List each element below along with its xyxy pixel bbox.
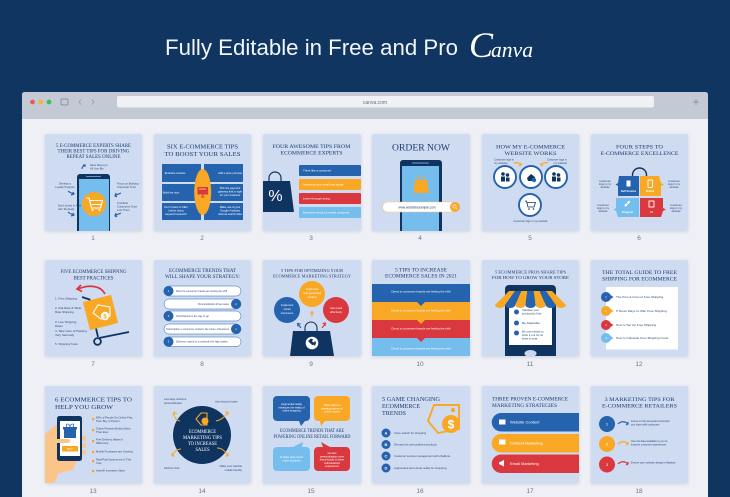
tip text: improve customer experiences [631, 442, 667, 446]
labels: Make your website [220, 464, 243, 468]
tip bars: Think like a customer [303, 168, 331, 172]
search bar: www.websiteexample.com [398, 205, 436, 209]
steps: 5 Smart Ways to Offer Free Shipping [616, 309, 667, 313]
side labels: Customer [668, 179, 680, 183]
title: SHIPPING FOR ECOMMERCE [602, 276, 678, 282]
steps: How to Set Up Free Shipping [616, 323, 656, 327]
side labels [597, 179, 683, 213]
puzzle blocks: Self Service [621, 189, 637, 193]
title [164, 144, 241, 158]
center ellipse icon [194, 169, 211, 215]
list: stick it out for at [522, 333, 543, 337]
central circle: SALES [196, 448, 210, 453]
title [60, 269, 127, 282]
speech bubbles: AI helps shop owner [280, 455, 303, 459]
browser content area [22, 119, 708, 497]
number 6: 6 [637, 235, 641, 242]
steps: 4 [605, 336, 607, 340]
side labels: Customer [670, 203, 682, 207]
number 10: 10 [416, 361, 424, 368]
shipping list: 3. Live Shipping [55, 320, 77, 324]
card 18 [591, 386, 688, 483]
labels: Add live chat [164, 466, 180, 470]
arrows [618, 422, 628, 465]
title: MARKETING STRATEGIES [492, 403, 557, 409]
title: WILL SHAPE YOUR STRATEGY: [165, 275, 240, 280]
puzzle blocks: AI [650, 210, 653, 214]
title: THEIR BEST TIPS FOR DRIVING [58, 150, 130, 154]
card 8 [154, 260, 251, 356]
number 11: 11 [527, 361, 534, 368]
list: Year [96, 461, 102, 465]
speech bubbles: Augmented reality [281, 402, 303, 406]
number 16: 16 [416, 488, 424, 495]
number 15: 15 [307, 488, 315, 495]
title: 5 TIPS TO INCREASE [395, 268, 447, 274]
side labels: logs in my [599, 182, 612, 186]
title: REPEAT SALES ONLINE [66, 155, 121, 160]
headline: Fully Editable in Free and Pro [165, 35, 458, 60]
strategy bars: Content Marketing [510, 440, 543, 446]
title [492, 396, 568, 409]
arrows [172, 412, 228, 456]
tip circles: content [308, 295, 317, 299]
title: 5 GAME CHANGING [382, 396, 441, 403]
list: Intent/If Increases Sales [96, 468, 125, 472]
labels: Customer logs in [547, 158, 567, 162]
card 3 [263, 134, 361, 230]
tip bars: Business email to rewrite customer [303, 210, 350, 214]
tip text: Don't invest in SEO [164, 205, 188, 209]
callouts: Don't Invest in Paid [58, 204, 82, 208]
shipping list: Very Seriously [55, 333, 75, 337]
labels: Use discount sales [215, 400, 238, 404]
title [600, 144, 679, 157]
list: Online Reviews Build a More [96, 426, 131, 430]
steps: 3 [605, 323, 607, 327]
labels: my website [554, 161, 567, 165]
rows: B [385, 442, 388, 447]
callouts [55, 163, 139, 212]
card 11 [482, 260, 579, 357]
list: Be Adaptable [522, 321, 540, 325]
central circle: TO INCREASE [188, 442, 217, 447]
number 17: 17 [526, 488, 534, 495]
title: FOR HOW TO GROW YOUR STORE [492, 275, 569, 280]
labels: Leverage real-time [164, 397, 187, 401]
list: Mobile Purchases are Growing [96, 450, 133, 454]
shopping bag [290, 322, 334, 356]
list: Then Buy in Person [96, 419, 120, 423]
list: Be committed to [522, 330, 544, 334]
browser toolbar: canva.com [363, 100, 387, 106]
list: 83% of People Go Online First, [96, 416, 133, 420]
list: Validate your [522, 308, 539, 312]
tip text: Pick the payment [220, 186, 241, 190]
stacked bands: Direct to consumer brands are feeling the shift [391, 326, 451, 330]
speech bubbles: brand loyalty & better [320, 458, 344, 462]
tip text: Build the trust [163, 190, 179, 194]
card 12 [591, 260, 688, 356]
list [92, 416, 133, 472]
pill text: Direct to consumer brands are feeling the shift [176, 290, 227, 293]
title: TRENDS [382, 410, 407, 417]
callouts: Develop a [59, 182, 72, 186]
callouts: Save Money in [90, 163, 108, 167]
tip text: for your business [220, 193, 241, 197]
tip bars: Learn through doing [303, 196, 330, 200]
title [602, 397, 677, 410]
title: WEBSITE WORKS [504, 151, 556, 157]
bag handle [632, 168, 646, 176]
speech bubbles: Go-wire [327, 451, 337, 455]
tip bars: Interview your small test buyer [303, 182, 344, 186]
card 6 [591, 134, 688, 230]
tip circles: social [284, 307, 291, 311]
title: 5 TIPS FOR OPTIMIZING YOUR [281, 268, 343, 273]
side labels: logs in my [670, 206, 683, 210]
phone [400, 160, 442, 231]
steps: How to Calculate Free Shipping Costs [616, 336, 669, 340]
browser window [22, 92, 708, 497]
number 8: 8 [200, 361, 204, 368]
speech bubbles: enhances the reality of [278, 405, 305, 409]
list: least a year [522, 336, 538, 340]
card 14 [154, 386, 251, 483]
title: POWERING ONLINE RETAIL FORWARD [274, 435, 351, 440]
list: Free Delivery Makes A [96, 438, 123, 442]
title: TO BOOST YOUR SALES [164, 151, 241, 158]
shopping bag: % [268, 188, 283, 205]
badge digits: 1 [168, 289, 170, 293]
number 12: 12 [635, 361, 643, 368]
speech bubbles: experiences [325, 464, 340, 468]
tip bars [299, 165, 361, 218]
title: ECOMMERCE SALES IN 2021 [385, 274, 457, 280]
stacked bands: Direct to consumer brands are feeling the shift [391, 308, 451, 312]
circle icons [501, 172, 560, 210]
title: 5 E-COMMERCE EXPERTS SHARE [56, 144, 131, 149]
hand [45, 424, 78, 483]
title: BEST PRACTICES [74, 276, 114, 282]
tip circles: user-generated [303, 291, 322, 295]
callouts: Ads Too Early [58, 207, 75, 211]
curved arrows [514, 163, 548, 166]
number 4: 4 [418, 235, 422, 242]
steps: The Pros & Cons of Free Shipping [616, 295, 663, 299]
speech bubbles: personalization sees [320, 454, 345, 458]
number 14: 14 [198, 488, 206, 495]
title [492, 270, 569, 280]
arrows [298, 312, 326, 328]
number badges [164, 286, 241, 347]
tip text: before doing [169, 208, 184, 212]
phone: BUY [67, 447, 73, 451]
callouts: Lost Them [117, 208, 130, 212]
card 9 [263, 260, 361, 356]
number 7: 7 [91, 361, 95, 368]
side labels: logs in my [597, 206, 610, 210]
tip text: Ensure your website design is flawless [631, 460, 676, 464]
tip text: keyword research [165, 212, 187, 216]
title: ECOMMERCE [382, 403, 420, 410]
number 5: 5 [528, 235, 532, 242]
number 2: 2 [200, 235, 204, 242]
title [602, 270, 678, 282]
title [272, 144, 351, 156]
awning [495, 291, 566, 308]
tip boxes [162, 164, 243, 220]
title [274, 429, 351, 440]
pills [164, 286, 241, 346]
title [496, 144, 566, 157]
tip circles: commerce [281, 311, 294, 315]
rows: Customer service management with chatbots [394, 454, 451, 458]
tip circles: Implement [281, 303, 294, 307]
number 3: 3 [309, 235, 313, 242]
tip circles: Use email [330, 306, 342, 310]
phone illustration [77, 174, 110, 231]
badge digits [168, 289, 237, 344]
puzzle blocks [614, 176, 666, 217]
badge digits: 5 [168, 340, 170, 344]
step circles [494, 166, 567, 216]
title [273, 268, 352, 278]
title: E-COMMERCE RETAILERS [602, 404, 677, 410]
speech bubbles: There will be a [324, 403, 341, 407]
card 10 [372, 260, 470, 356]
title: E-COMMERCE EXCELLENCE [600, 151, 679, 157]
title: HELP YOU GROW [55, 404, 113, 411]
title: 6 ECOMMERCE TIPS TO [55, 396, 133, 404]
tip text [631, 419, 676, 464]
tip text: Use the data available to you to [631, 439, 668, 443]
card 15 [263, 386, 361, 483]
tip text: Make use of your [220, 205, 240, 209]
puzzle blocks: Mobile [646, 189, 655, 193]
strategy bars: Website Content [510, 420, 540, 424]
hand truck [82, 297, 129, 345]
number 13: 13 [89, 488, 97, 495]
callouts: Loyalty Program [55, 185, 76, 189]
shipping list: 2. Flat Rate & Table [55, 306, 82, 310]
tip text [163, 171, 242, 216]
tip circles: Implement [306, 287, 319, 291]
pill text: Subscription e-commerce model is the future of business [166, 328, 230, 331]
pill text: Delivery's speed is a contender for high stakes [176, 341, 228, 344]
card 1 [45, 134, 142, 231]
tip text: internal search data [218, 212, 242, 216]
headline: anva [491, 37, 533, 62]
card 2 [154, 134, 251, 230]
title: FIVE ECOMMERCE SHIPPING [60, 269, 127, 275]
title [385, 268, 457, 280]
title: 3 MARKETING TIPS FOR [604, 397, 675, 403]
badge digits: 2 [235, 302, 237, 306]
shipping list: 4. Take Care of Packing [55, 329, 87, 333]
speech bubbles: online shopping [282, 409, 301, 413]
template grid [45, 134, 688, 495]
title: ECOMMERCE TRENDS THAT [169, 269, 236, 274]
red arrow [77, 285, 105, 294]
speech bubbles: individualized [324, 461, 340, 465]
card 17 [482, 386, 579, 483]
side labels: Customer [597, 203, 609, 207]
pill text: Omnichannel is the way to go [176, 315, 209, 318]
tip text: gateway that is right [218, 190, 242, 194]
list: product(s) first [522, 312, 541, 316]
title: FOUR STEPS TO [616, 144, 663, 150]
steps [601, 292, 669, 343]
title: THE TOTAL GUIDE TO FREE [602, 270, 678, 276]
strategy bars: Email Marketing [510, 461, 539, 466]
speech bubbles: mobile search [324, 410, 341, 414]
speech bubbles: growing volume of [321, 406, 343, 410]
title: HOW MY E-COMMERCE [496, 144, 566, 150]
orange parcel: $ [103, 314, 107, 320]
title: ECOMMERCE TRENDS THAT ARE [280, 429, 344, 434]
labels [494, 158, 567, 223]
steps: 1 [605, 295, 607, 299]
card 7 [45, 260, 142, 356]
list [514, 308, 544, 340]
central circle: ECOMMERCE [189, 430, 216, 435]
white panel [606, 287, 678, 350]
tip text: Add a price promise [218, 171, 242, 175]
side labels: website [600, 185, 610, 189]
callouts: Customers Once [117, 204, 138, 208]
puzzle blocks: Integrate [622, 210, 634, 214]
strategy bars [492, 413, 579, 473]
title: ORDER NOW [392, 142, 451, 152]
pill text: Personalization drives sales [198, 303, 230, 306]
list: Real-Paid Options are In This [96, 458, 132, 462]
price tag icon: $ [448, 418, 455, 432]
title: SIX E-COMMERCE TIPS [167, 144, 239, 150]
shipping list: 5. Shipping Tools [55, 342, 78, 346]
number 18: 18 [635, 488, 643, 495]
tip circles [274, 281, 349, 323]
side labels: website [669, 185, 679, 189]
step circles: 3 [606, 462, 609, 467]
labels [164, 397, 243, 472]
rows: Augmented and virtual reality for shopping [394, 466, 447, 470]
tip text: Embrace reviews [165, 171, 186, 175]
labels: my website [494, 161, 508, 165]
shipping list: Rate Shipping [55, 310, 74, 314]
speech bubbles: reach shoppers [283, 458, 301, 462]
card 16 [372, 386, 470, 483]
card 5 [482, 134, 579, 230]
storefront phone [505, 285, 556, 357]
side labels: website [671, 209, 681, 213]
speech bubbles [273, 396, 350, 471]
labels: mobile friendly [225, 468, 243, 472]
callouts: All Your Biz [90, 166, 104, 170]
tip text: Google Analytics [220, 208, 241, 212]
side labels: website [598, 209, 608, 213]
callouts: Corporate Trust [117, 185, 136, 189]
rows: C [385, 454, 388, 458]
badge digits: 4 [235, 327, 237, 331]
step circles: 2 [606, 442, 609, 446]
central circle: MARKETING TIPS [183, 436, 222, 441]
list: Difference [96, 441, 109, 445]
rows [382, 428, 451, 472]
callouts: Tool Best [117, 201, 128, 205]
headline [165, 25, 533, 65]
labels: Customer logs in [494, 158, 515, 162]
browser toolbar [22, 92, 708, 119]
title: ECOMMERCE EXPERTS [280, 150, 343, 156]
title [56, 144, 131, 160]
step circles [599, 416, 615, 472]
stacked bands: Direct to consumer brands are feeling the shift [391, 290, 451, 294]
title: ECOMMERCE MARKETING STRATEGY [273, 274, 352, 278]
headline: C [469, 25, 494, 65]
shipping list: 1. Free Shipping [55, 296, 77, 300]
tip text: you have with customers [631, 422, 660, 426]
card 4 [372, 134, 470, 231]
rows: Voice search for shopping [394, 431, 427, 435]
badge digits: 3 [168, 314, 170, 318]
title: 5 ECOMMERCE PROS SHARE TIPS [495, 270, 566, 274]
tip circles: effectively [330, 310, 343, 314]
rows: Demand for personalized products [394, 442, 437, 446]
title [55, 396, 133, 411]
callouts: Focus on Building [117, 182, 139, 186]
title [382, 396, 441, 417]
rows: D [385, 466, 388, 470]
stacked bands: Direct to consumer brands are feeling the shift [391, 346, 451, 350]
card 13 [45, 386, 142, 483]
step circles: 1 [606, 422, 609, 426]
list: Than Ever [96, 430, 109, 434]
stacked bands [372, 284, 470, 356]
title: FOUR AWESOME TIPS FROM [272, 144, 351, 150]
arrows [68, 165, 121, 217]
bag icon [414, 176, 429, 193]
labels: Customer logs in my website [513, 219, 548, 223]
pill text [166, 290, 230, 344]
rows: A [385, 430, 388, 436]
labels: personalization [164, 401, 183, 405]
shipping list [55, 296, 87, 346]
tip text: Focus on the personal connection [631, 419, 670, 423]
side labels: logs in my [668, 182, 681, 186]
title: THREE PROVEN E-COMMERCE [492, 396, 568, 402]
number 1: 1 [91, 235, 95, 242]
title [165, 269, 240, 280]
number 9: 9 [309, 361, 313, 368]
side labels: Customer [599, 179, 611, 183]
central circle [173, 406, 231, 464]
shipping list: Rates [55, 324, 63, 328]
steps: 2 [605, 309, 607, 313]
